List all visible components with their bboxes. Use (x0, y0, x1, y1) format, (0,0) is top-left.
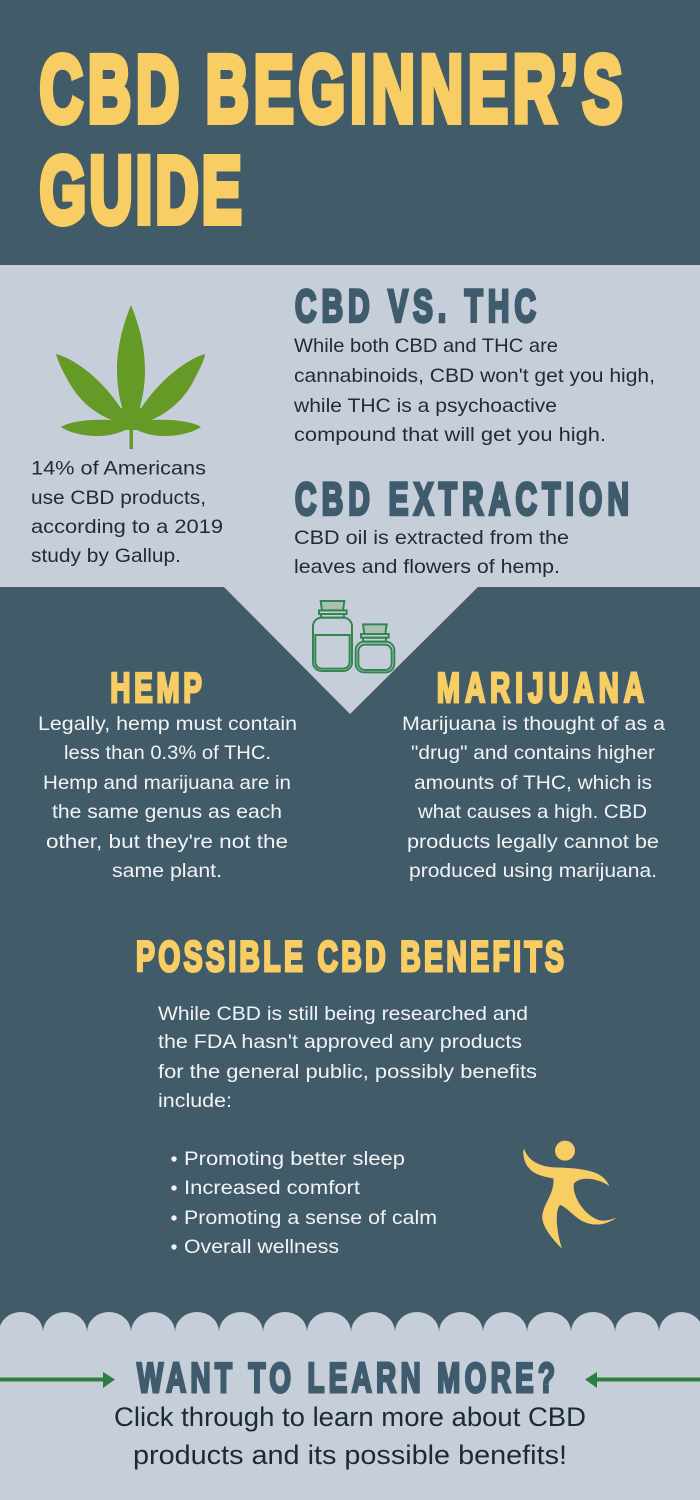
text block: call to action: products and its possible benefits! (133, 1440, 567, 1470)
text block: Marijuana: Marijuana is thought of as a (402, 713, 665, 735)
icon: oil jars (313, 601, 394, 672)
text block: Hemp (38, 713, 297, 882)
text block: CBD vs. THC: while THC is a psychoactive (293, 395, 557, 417)
text block: CBD vs. THC (293, 335, 655, 446)
title: GUIDE (40, 136, 242, 243)
text block: Marijuana: products legally cannot be (407, 831, 659, 853)
icon: dancing figure (523, 1141, 617, 1249)
text block: benefits intro: for the general public, possibly benefits (158, 1061, 537, 1083)
text block: statistic: according to a 2019 (31, 516, 223, 538)
text block: Marijuana: amounts of THC, which is (414, 772, 652, 794)
text block: Hemp: the same genus as each (52, 801, 282, 823)
text block: Marijuana: produced using marijuana. (409, 860, 657, 882)
list: benefits (171, 1148, 437, 1258)
text block: Hemp: Legally, hemp must contain (38, 713, 297, 735)
text block: benefits intro: the FDA hasn't approved any products (158, 1031, 522, 1053)
icon: cannabis leaf (56, 305, 205, 449)
text block: Hemp: same plant. (112, 860, 222, 882)
heading: CBD vs. THC: CBD VS. THC (295, 281, 536, 332)
list: benefits: Overall wellness (184, 1236, 339, 1258)
text block: CBD extraction (294, 527, 569, 578)
list: benefits: Promoting a sense of calm (184, 1207, 437, 1229)
heading: Hemp: HEMP (110, 664, 202, 711)
text block: Marijuana: what causes a high. CBD (417, 801, 647, 823)
text block: CBD extraction: CBD oil is extracted from the (294, 527, 569, 549)
panel: call to action with scalloped top (0, 1312, 700, 1500)
text block: statistic: use CBD products, (31, 487, 206, 509)
text block: Hemp: other, but they're not the (46, 831, 288, 853)
text block: CBD vs. THC: compound that will get you high. (294, 424, 606, 446)
list: benefits: Promoting better sleep (184, 1148, 405, 1170)
text block: Marijuana (402, 713, 665, 882)
text block: Hemp: less than 0.3% of THC. (64, 742, 271, 764)
text block: benefits intro: include: (158, 1090, 232, 1112)
text block: call to action (114, 1402, 586, 1470)
text block: benefits intro (158, 1003, 537, 1112)
title: CBD BEGINNER’S (40, 35, 622, 142)
heading: Marijuana: MARIJUANA (437, 664, 644, 711)
title (40, 35, 622, 243)
text block: statistic: 14% of Americans (31, 458, 206, 480)
heading: possible CBD benefits: POSSIBLE CBD BENEFITS (136, 932, 564, 980)
arrow: left (0, 1372, 115, 1388)
text block: statistic: study by Gallup. (31, 545, 181, 567)
text block: call to action: Click through to learn more about CBD (114, 1402, 586, 1432)
text block: CBD extraction: leaves and flowers of hemp. (294, 556, 560, 578)
heading: want to learn more: WANT TO LEARN MORE? (137, 1354, 555, 1401)
text block: Hemp: Hemp and marijuana are in (43, 772, 291, 794)
list: benefits: Increased comfort (184, 1177, 361, 1199)
heading: CBD extraction: CBD EXTRACTION (295, 474, 629, 525)
text block: CBD vs. THC: cannabinoids, CBD won't get you high, (294, 365, 655, 387)
text block: benefits intro: While CBD is still being researched and (158, 1003, 528, 1025)
text block: CBD vs. THC: While both CBD and THC are (294, 335, 558, 357)
text block: Marijuana: "drug" and contains higher (411, 742, 656, 764)
panel: intro light section (0, 265, 700, 714)
arrow: right (585, 1372, 700, 1388)
text block: statistic (31, 458, 223, 567)
